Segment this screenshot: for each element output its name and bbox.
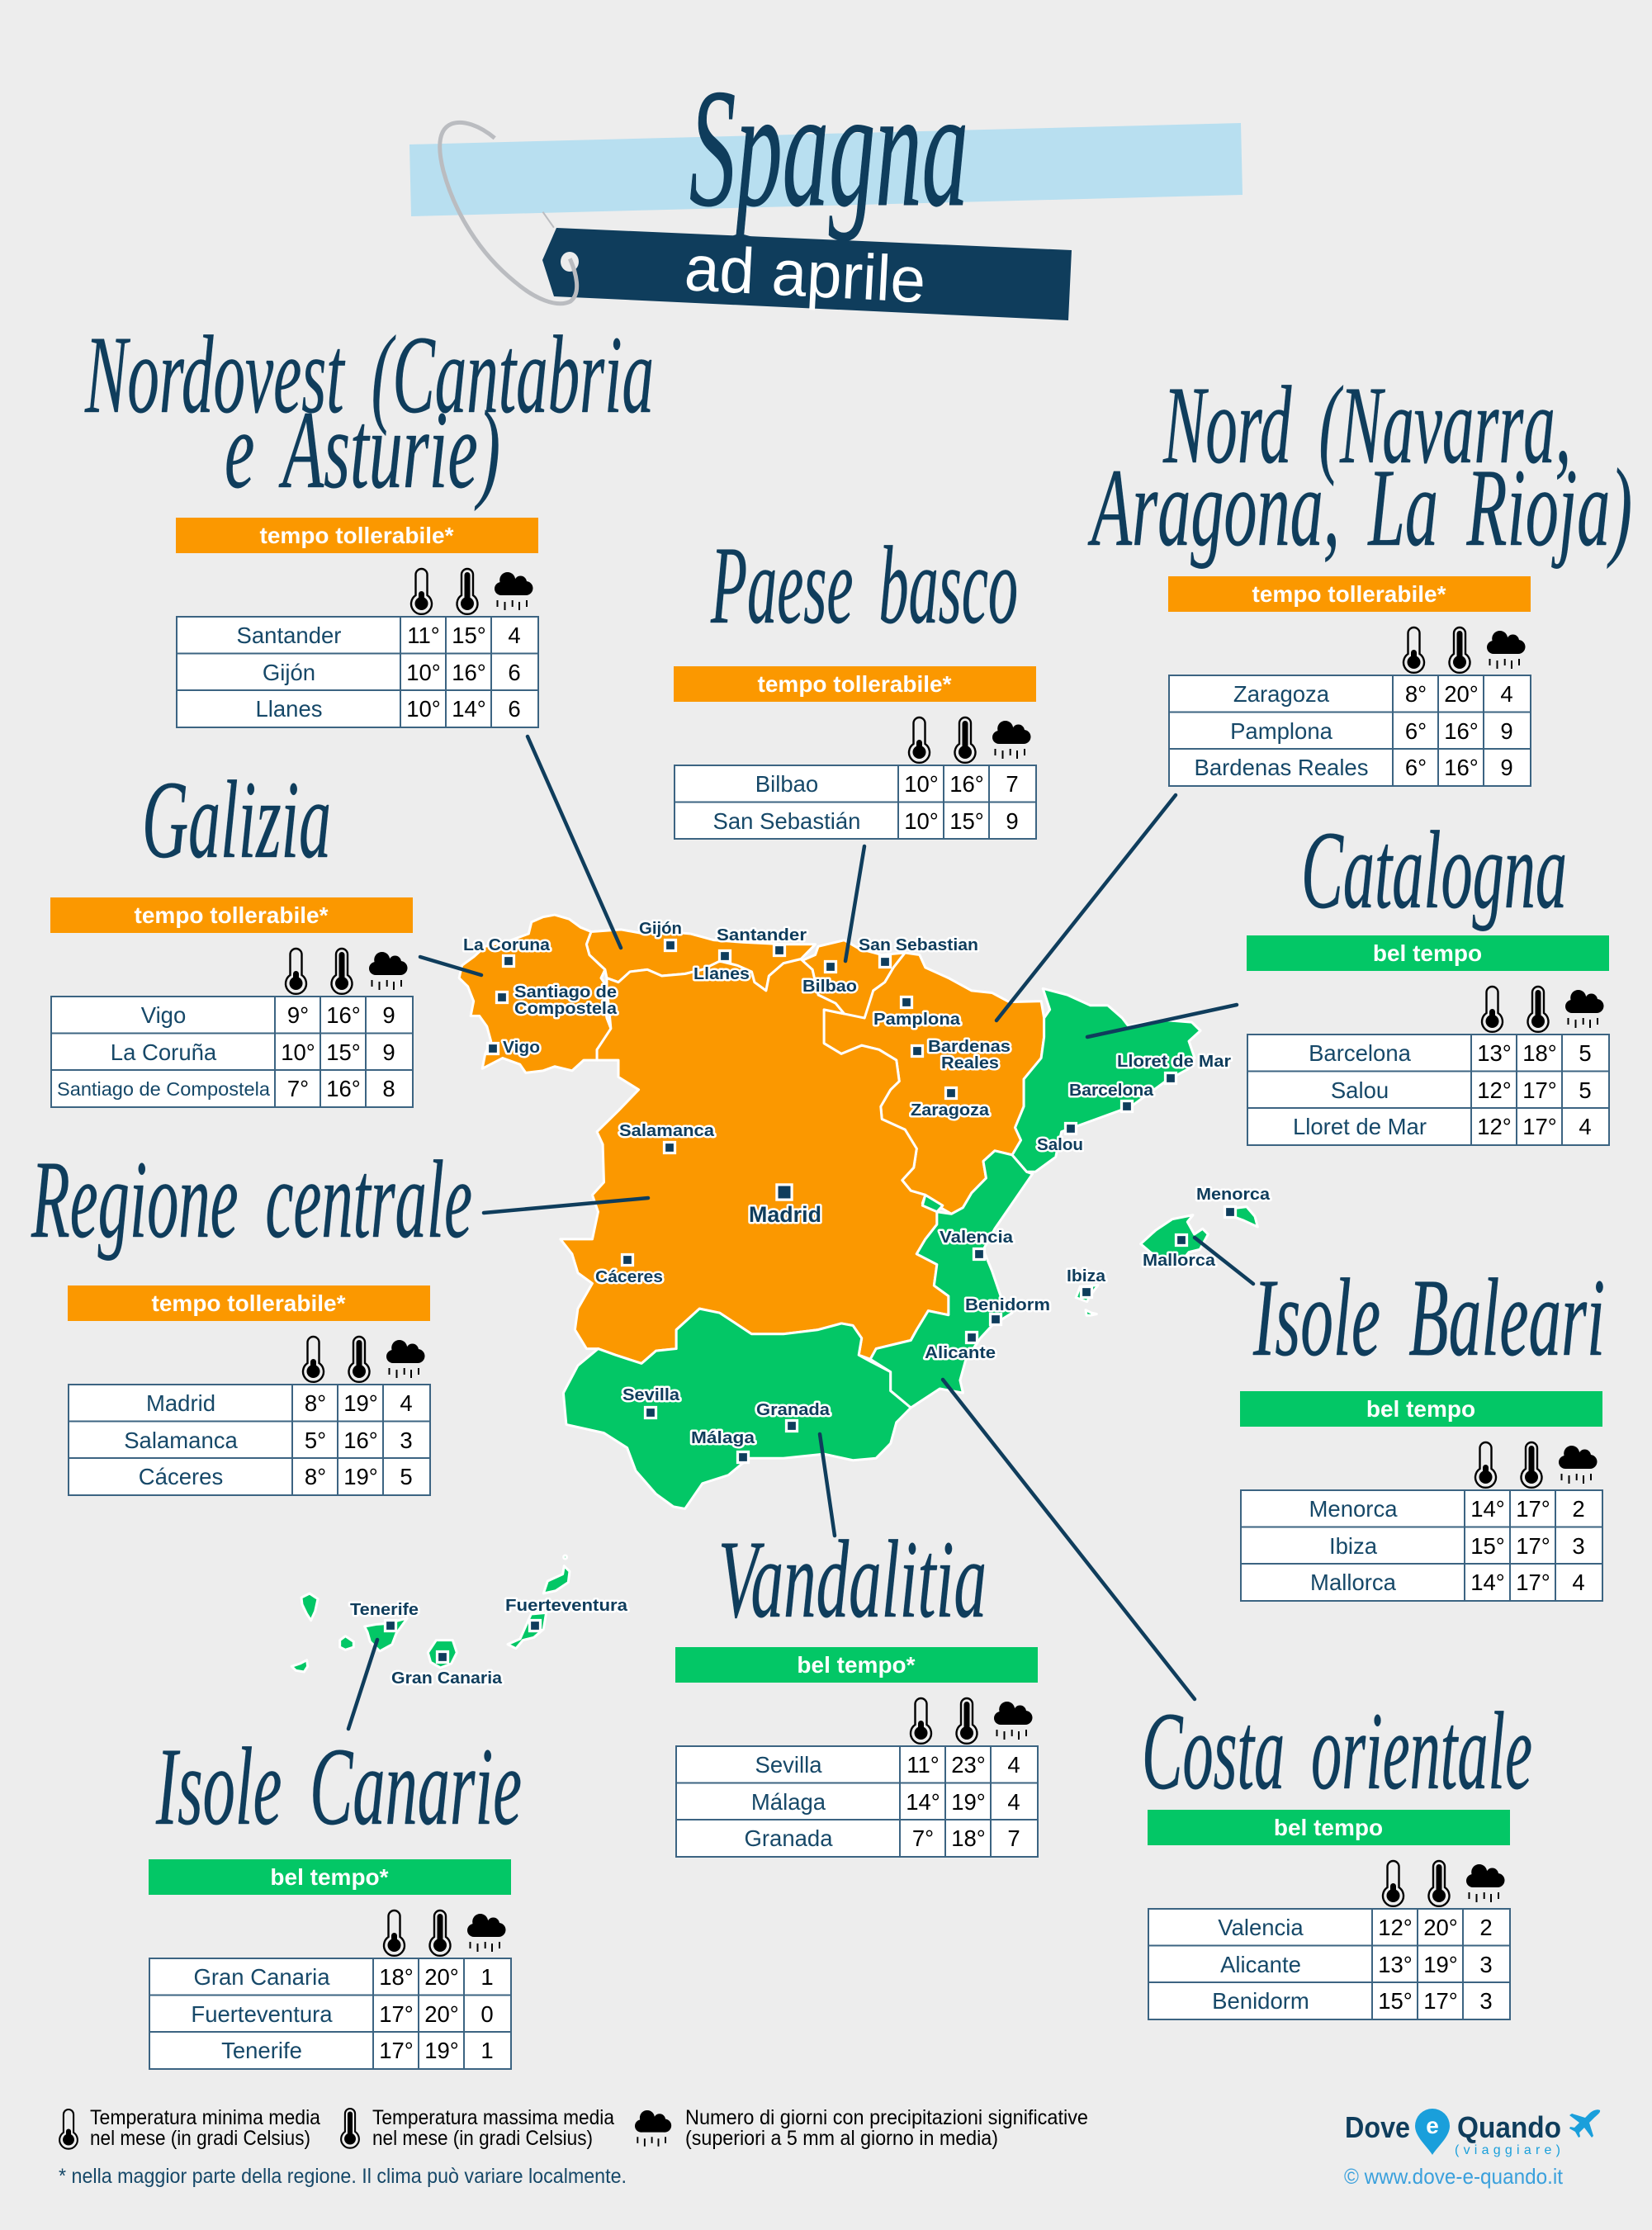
climate card: bel tempo* bbox=[270, 1864, 389, 1890]
city labels: Compostela bbox=[514, 999, 618, 1018]
climate card: 18° bbox=[379, 1964, 414, 1990]
city markers bbox=[385, 940, 1235, 1663]
climate card: 16° bbox=[1444, 718, 1479, 744]
climate card: 16° bbox=[326, 1076, 361, 1101]
tag: ad aprile bbox=[542, 228, 1072, 320]
city labels: San Sebastian bbox=[859, 935, 978, 954]
climate card: 16° bbox=[949, 771, 984, 797]
climate card: 15° bbox=[1378, 1988, 1413, 2014]
climate card: Menorca bbox=[1309, 1496, 1398, 1522]
city labels: Salamanca bbox=[619, 1121, 715, 1140]
climate card: 13° bbox=[1378, 1952, 1413, 1977]
climate card: 9 bbox=[1500, 718, 1513, 744]
climate card: 5 bbox=[400, 1464, 413, 1489]
climate card: 17° bbox=[379, 2001, 414, 2027]
legend text: rain days bbox=[685, 2106, 1088, 2150]
icon: rain cloud bbox=[635, 2110, 671, 2147]
climate card: La Coruña bbox=[111, 1039, 217, 1065]
climate card: 12° bbox=[1477, 1114, 1512, 1139]
city labels: Barcelona bbox=[1069, 1081, 1154, 1100]
climate card: 19° bbox=[951, 1789, 986, 1815]
arrow lines bbox=[348, 736, 1253, 1729]
climate card bbox=[1148, 1810, 1510, 2019]
climate card: 17° bbox=[1423, 1988, 1458, 2014]
climate card: 4 bbox=[1500, 681, 1513, 707]
climate card: Gijón bbox=[263, 660, 315, 685]
climate card: 17° bbox=[1516, 1496, 1550, 1522]
city labels: Ibiza bbox=[1067, 1267, 1106, 1285]
logo: Dove e Quando: (viaggiare) bbox=[1455, 2143, 1560, 2157]
legend text: rain days: Numero di giorni con precipitazioni significative bbox=[685, 2106, 1088, 2129]
climate card: Granada bbox=[744, 1825, 833, 1851]
climate card bbox=[1240, 1391, 1602, 1601]
panel: Nord bbox=[1087, 364, 1632, 786]
city labels: Cáceres bbox=[595, 1267, 663, 1286]
region: Paese basco bbox=[801, 940, 905, 1020]
heading: Nordovest: e Asturie) bbox=[225, 389, 500, 512]
climate card: 4 bbox=[400, 1390, 413, 1416]
city labels bbox=[350, 919, 1271, 1688]
city labels: Santander bbox=[717, 926, 807, 945]
icon: map pin bbox=[1415, 2109, 1450, 2155]
climate card: 17° bbox=[1522, 1077, 1557, 1103]
climate card: 16° bbox=[1444, 755, 1479, 780]
heading: Nordovest bbox=[84, 314, 654, 512]
climate card: 19° bbox=[424, 2038, 459, 2063]
region: Nord bbox=[824, 953, 1044, 1214]
legend text: rain days: (superiori a 5 mm al giorno in media) bbox=[685, 2127, 998, 2150]
climate card: 8 bbox=[382, 1076, 395, 1101]
climate card: 10° bbox=[281, 1039, 315, 1065]
climate card: 15° bbox=[949, 808, 984, 834]
climate card: 14° bbox=[1470, 1496, 1505, 1522]
panel: Paese basco bbox=[674, 524, 1036, 839]
climate card: 2 bbox=[1572, 1496, 1585, 1522]
climate card: 23° bbox=[951, 1752, 986, 1778]
legend text: minimum temperature: Temperatura minima media bbox=[90, 2106, 320, 2129]
climate card bbox=[1168, 576, 1531, 786]
region: Nordovest bbox=[586, 930, 816, 991]
climate card: Alicante bbox=[1220, 1952, 1301, 1977]
climate card: 8° bbox=[305, 1464, 326, 1489]
logo: Dove e Quando: Quando bbox=[1457, 2110, 1561, 2144]
climate card: Zaragoza bbox=[1233, 681, 1330, 707]
climate card: 14° bbox=[906, 1789, 940, 1815]
climate card: 20° bbox=[424, 2001, 459, 2027]
climate card: 12° bbox=[1477, 1077, 1512, 1103]
legend text: maximum temperature bbox=[372, 2106, 614, 2150]
city labels: Pamplona bbox=[873, 1010, 961, 1029]
climate card: 15° bbox=[1470, 1533, 1505, 1559]
logo: Dove e Quando bbox=[1344, 2109, 1600, 2189]
climate card: Bilbao bbox=[755, 771, 818, 797]
climate card: 4 bbox=[1007, 1789, 1020, 1815]
city labels: Llanes bbox=[693, 964, 750, 983]
climate card: Pamplona bbox=[1230, 718, 1333, 744]
climate card: 3 bbox=[400, 1427, 413, 1453]
climate card: 4 bbox=[508, 623, 521, 648]
climate card: 13° bbox=[1477, 1040, 1512, 1066]
climate card: 12° bbox=[1378, 1915, 1413, 1940]
climate card: 9 bbox=[382, 1002, 395, 1028]
climate card: 17° bbox=[1522, 1114, 1557, 1139]
panel: Galizia bbox=[50, 759, 413, 1107]
legend text: maximum temperature: nel mese (in gradi Celsius) bbox=[372, 2127, 593, 2150]
city labels: Fuerteventura bbox=[505, 1596, 628, 1615]
climate card: Ibiza bbox=[1329, 1533, 1378, 1559]
climate card: 5 bbox=[1579, 1077, 1592, 1103]
climate card: Gran Canaria bbox=[193, 1964, 330, 1990]
climate card: 1 bbox=[480, 1964, 494, 1990]
city labels: Menorca bbox=[1196, 1185, 1271, 1204]
climate card: 17° bbox=[1516, 1533, 1550, 1559]
panel: Nordovest bbox=[84, 314, 654, 727]
icon: map pin: e bbox=[1426, 2113, 1439, 2138]
legend text: minimum temperature: nel mese (in gradi Celsius) bbox=[90, 2127, 310, 2150]
climate card: 4 bbox=[1579, 1114, 1592, 1139]
climate card: 3 bbox=[1572, 1533, 1585, 1559]
climate card: 10° bbox=[406, 660, 441, 685]
legend text: minimum temperature bbox=[90, 2106, 320, 2150]
climate card: 5 bbox=[1579, 1040, 1592, 1066]
climate card: 2 bbox=[1479, 1915, 1493, 1940]
region: Galizia bbox=[459, 915, 611, 1072]
panel: Costa orientale bbox=[1142, 1690, 1532, 2019]
climate card: bel tempo bbox=[1366, 1396, 1475, 1422]
heading: Regione centrale: Regione centrale bbox=[31, 1139, 472, 1262]
climate card: 7 bbox=[1007, 1825, 1020, 1851]
climate card: 9 bbox=[1006, 808, 1019, 834]
climate card bbox=[68, 1285, 430, 1495]
city labels: Benidorm bbox=[965, 1295, 1050, 1314]
climate card: 16° bbox=[452, 660, 486, 685]
heading: Galizia: Galizia bbox=[142, 759, 331, 882]
climate card: 19° bbox=[1423, 1952, 1458, 1977]
panel: Catalogna bbox=[1247, 809, 1609, 1145]
climate card: Salamanca bbox=[124, 1427, 238, 1453]
climate card: 18° bbox=[951, 1825, 986, 1851]
climate card: 14° bbox=[1470, 1570, 1505, 1595]
climate card: 16° bbox=[326, 1002, 361, 1028]
climate card: 1 bbox=[480, 2038, 494, 2063]
icon: minimum temperature bbox=[59, 2109, 78, 2149]
climate card: Cáceres bbox=[139, 1464, 223, 1489]
climate card: 6 bbox=[508, 660, 521, 685]
climate card: 15° bbox=[326, 1039, 361, 1065]
city labels: Gran Canaria bbox=[391, 1669, 503, 1688]
climate card: 7° bbox=[912, 1825, 934, 1851]
climate card: Madrid bbox=[146, 1390, 215, 1416]
panel: Vandalitia bbox=[675, 1518, 1038, 1857]
climate card: tempo tollerabile* bbox=[260, 523, 454, 548]
icon: maximum temperature bbox=[341, 2109, 359, 2148]
climate card: Málaga bbox=[751, 1789, 826, 1815]
city labels: Tenerife bbox=[350, 1600, 419, 1619]
city labels: Santiago de bbox=[514, 982, 617, 1001]
climate card: tempo tollerabile* bbox=[758, 671, 952, 697]
climate card: 10° bbox=[904, 808, 939, 834]
climate card: 6° bbox=[1405, 718, 1427, 744]
climate card bbox=[675, 1647, 1038, 1857]
city labels: Granada bbox=[756, 1400, 831, 1419]
panel: Isole Baleari bbox=[1240, 1257, 1605, 1601]
climate card: 4 bbox=[1572, 1570, 1585, 1595]
climate card: 20° bbox=[1423, 1915, 1458, 1940]
legend text: maximum temperature: Temperatura massima media bbox=[372, 2106, 614, 2129]
region: Catalogna bbox=[1012, 988, 1200, 1172]
climate card: 16° bbox=[343, 1427, 378, 1453]
climate card: Santiago de Compostela bbox=[57, 1078, 270, 1100]
climate card: 8° bbox=[305, 1390, 326, 1416]
climate card bbox=[1247, 935, 1609, 1145]
climate card: Barcelona bbox=[1309, 1040, 1412, 1066]
region: Vandalitia bbox=[563, 1309, 911, 1508]
city labels: Lloret de Mar bbox=[1117, 1052, 1231, 1071]
climate card: Salou bbox=[1331, 1077, 1389, 1103]
city labels: Málaga bbox=[691, 1428, 755, 1447]
climate card: San Sebastián bbox=[713, 808, 860, 834]
climate card bbox=[176, 518, 538, 727]
climate card: tempo tollerabile* bbox=[135, 902, 329, 928]
climate card: 0 bbox=[480, 2001, 494, 2027]
climate card: 7° bbox=[287, 1076, 309, 1101]
map of mainland Spain bbox=[459, 915, 1200, 1508]
legend bbox=[59, 2106, 1088, 2188]
climate card: 11° bbox=[407, 623, 440, 648]
city labels: Sevilla bbox=[622, 1385, 680, 1404]
climate card: 3 bbox=[1479, 1988, 1493, 2014]
city labels: Valencia bbox=[940, 1228, 1014, 1247]
climate card bbox=[149, 1859, 511, 2069]
climate card: 4 bbox=[1007, 1752, 1020, 1778]
climate card: 15° bbox=[452, 623, 486, 648]
climate card: 20° bbox=[424, 1964, 459, 1990]
city labels: Bardenas bbox=[928, 1037, 1011, 1056]
climate card: 9° bbox=[287, 1002, 309, 1028]
climate card: 19° bbox=[343, 1390, 378, 1416]
panel: Regione centrale bbox=[31, 1139, 472, 1495]
heading: Nordovest: Nordovest (Cantabria bbox=[84, 314, 654, 437]
climate card: 9 bbox=[382, 1039, 395, 1065]
climate card: 20° bbox=[1444, 681, 1479, 707]
climate card: Sevilla bbox=[755, 1752, 822, 1778]
climate card: 17° bbox=[379, 2038, 414, 2063]
climate card: Bardenas Reales bbox=[1195, 755, 1368, 780]
climate card: 18° bbox=[1522, 1040, 1557, 1066]
map: Balearic islands bbox=[1076, 1207, 1257, 1315]
climate card: 6° bbox=[1405, 755, 1427, 780]
tag string bbox=[440, 122, 577, 304]
climate card: Santander bbox=[237, 623, 341, 648]
climate card: 10° bbox=[406, 696, 441, 722]
climate card: Valencia bbox=[1218, 1915, 1304, 1940]
icon: airplane bbox=[1569, 2109, 1600, 2138]
title block bbox=[409, 54, 1243, 320]
climate card: Tenerife bbox=[221, 2038, 302, 2063]
city labels: Reales bbox=[941, 1053, 999, 1072]
city labels: Mallorca bbox=[1143, 1251, 1216, 1270]
panel: Isole Canarie bbox=[149, 1726, 522, 2069]
climate card: bel tempo* bbox=[797, 1652, 916, 1678]
website credit: © www.dove-e-quando.it bbox=[1344, 2164, 1564, 2189]
climate card bbox=[50, 897, 413, 1107]
climate card: 19° bbox=[343, 1464, 378, 1489]
climate card: Mallorca bbox=[1310, 1570, 1397, 1595]
climate card: Fuerteventura bbox=[191, 2001, 333, 2027]
heading: Paese basco: Paese basco bbox=[710, 524, 1018, 647]
climate card: Lloret de Mar bbox=[1293, 1114, 1427, 1139]
climate card: 17° bbox=[1516, 1570, 1550, 1595]
climate card: 10° bbox=[904, 771, 939, 797]
city labels: Alicante bbox=[925, 1343, 996, 1362]
climate card: 3 bbox=[1479, 1952, 1493, 1977]
climate card: 8° bbox=[1405, 681, 1427, 707]
climate card: 7 bbox=[1006, 771, 1019, 797]
city labels: Zaragoza bbox=[911, 1101, 990, 1120]
climate card: Llanes bbox=[255, 696, 323, 722]
heading: Vandalitia: Vandalitia bbox=[718, 1518, 987, 1641]
climate card: 11° bbox=[906, 1752, 940, 1778]
title: Spagna: Spagna bbox=[689, 54, 968, 242]
climate card bbox=[674, 666, 1036, 839]
climate card: 9 bbox=[1500, 755, 1513, 780]
footnote: * nella maggior parte della regione. Il clima può variare localmente. bbox=[59, 2165, 627, 2188]
city labels: Bilbao bbox=[802, 977, 857, 996]
city labels: Gijón bbox=[639, 919, 682, 938]
heading: Isole Canarie: Isole Canarie bbox=[155, 1726, 522, 1849]
map: Canary islands bbox=[291, 1555, 570, 1672]
climate card: 14° bbox=[452, 696, 486, 722]
city labels: Salou bbox=[1037, 1135, 1083, 1154]
climate card: 5° bbox=[305, 1427, 326, 1453]
climate card: bel tempo bbox=[1274, 1815, 1383, 1840]
heading: Nord bbox=[1087, 364, 1632, 570]
tag: ad aprile: ad aprile bbox=[683, 231, 927, 316]
region: Costa orientale bbox=[870, 1151, 1033, 1408]
region: Regione centrale bbox=[561, 959, 949, 1363]
climate card: Vigo bbox=[141, 1002, 186, 1028]
climate card: tempo tollerabile* bbox=[1252, 581, 1446, 607]
climate card: tempo tollerabile* bbox=[152, 1290, 346, 1316]
title band bbox=[409, 123, 1243, 216]
city labels: Vigo bbox=[503, 1038, 540, 1057]
city labels: La Coruna bbox=[463, 935, 551, 954]
climate card: bel tempo bbox=[1373, 940, 1482, 966]
climate card: Benidorm bbox=[1212, 1988, 1309, 2014]
logo: Dove e Quando: Dove bbox=[1345, 2110, 1410, 2144]
climate card: 6 bbox=[508, 696, 521, 722]
city labels: Madrid bbox=[749, 1202, 821, 1227]
